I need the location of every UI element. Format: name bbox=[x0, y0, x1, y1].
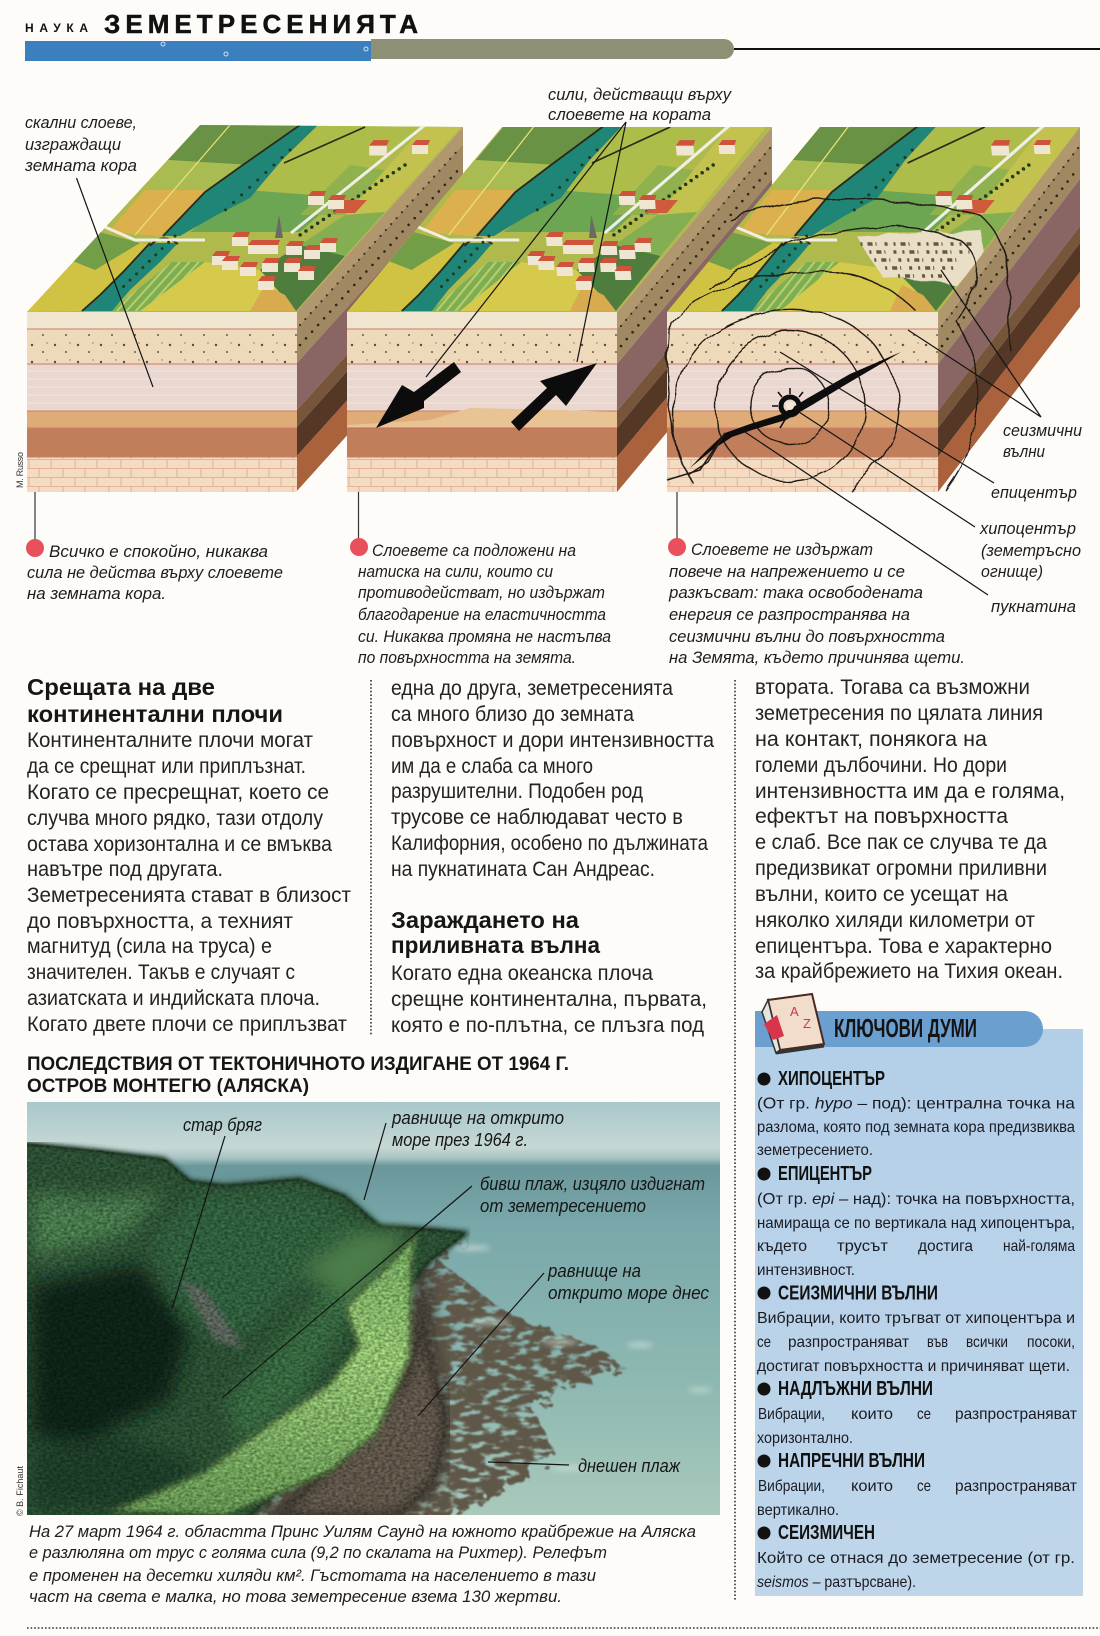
term: seismic bbox=[757, 1522, 1075, 1591]
caption 3: повече на напрежението и се bbox=[669, 562, 905, 581]
body text column 3: втората. Тогава са възможни bbox=[755, 676, 1030, 699]
body text column 3: е слаб. Все пак се случва те да bbox=[755, 831, 1047, 854]
caption 3: Слоевете не издържат bbox=[691, 540, 873, 559]
term: epicentre: интензивност. bbox=[757, 1262, 855, 1279]
heading: meeting of two plates: континентални плочи bbox=[27, 701, 283, 727]
term: seismic waves: разпространяват bbox=[788, 1334, 910, 1351]
caption 1: сила не действа върху слоевете bbox=[27, 563, 283, 582]
photo caption: На 27 март 1964 г. областта Принс Уилям Саунд на южното крайбрежие на Аляска bbox=[29, 1522, 696, 1541]
label: epicentre: епицентър bbox=[991, 483, 1077, 502]
term: epicentre: намираща се по вертикала над хипоцентъра, bbox=[757, 1215, 1075, 1232]
label: fracture: пукнатина bbox=[991, 597, 1076, 616]
photo heading: ОСТРОВ МОНТЕГЮ (АЛЯСКА) bbox=[27, 1076, 309, 1097]
diagram: block 3, rupture and seismic waves bbox=[664, 127, 1080, 493]
term: epicentre bbox=[757, 1163, 1075, 1279]
body text column 2: една до друга, земетресенията bbox=[391, 677, 673, 700]
forest and hillside bbox=[20, 1142, 470, 1525]
heading: meeting of two plates bbox=[27, 674, 283, 727]
photo caption bbox=[29, 1522, 696, 1606]
label: forces bbox=[548, 85, 732, 124]
seismic wave fronts bbox=[667, 199, 1010, 490]
body text column 3: епицентъра. Това е характерно bbox=[755, 935, 1052, 958]
caption 2 bbox=[350, 492, 611, 667]
body text column 1: значителен. Такъв е случаят с bbox=[27, 961, 295, 984]
body text column 1: Когато двете плочи се приплъзват bbox=[27, 1013, 347, 1036]
caption 1: Всичко е спокойно, никаква bbox=[49, 542, 268, 561]
photo label: former beach: от земетресението bbox=[480, 1196, 646, 1216]
photo label: sea level in 1964: равнище на открито bbox=[391, 1108, 564, 1128]
body text column 1: остава хоризонтална и се вмъква bbox=[27, 833, 332, 856]
body text column 1: Земетресенията стават в близост bbox=[27, 884, 351, 907]
body text after heading: която е по-плътна, се плъзга под bbox=[391, 1014, 704, 1037]
term: transverse waves: които bbox=[851, 1478, 893, 1495]
photo caption: е разлюляна от трус с голяма сила (9,2 по скалата на Рихтер). Релефът bbox=[29, 1543, 607, 1562]
header title: ЗЕМЕТРЕСЕНИЯТА bbox=[104, 9, 418, 39]
photo label: former beach: бивш плаж, изцяло издигнат bbox=[480, 1174, 705, 1194]
photo label: former beach bbox=[480, 1174, 705, 1216]
label: hypocentre bbox=[979, 519, 1081, 581]
icon: A-Z book: A bbox=[790, 1004, 799, 1019]
term: seismic: seismos – разтърсване). bbox=[757, 1574, 916, 1591]
label: seismic waves: сеизмични bbox=[1003, 421, 1083, 440]
term: seismic waves: СЕИЗМИЧНИ ВЪЛНИ bbox=[778, 1282, 938, 1304]
term: longitudinal waves: НАДЛЪЖНИ ВЪЛНИ bbox=[778, 1378, 933, 1400]
label: rock layers bbox=[24, 113, 137, 175]
term: longitudinal waves: хоризонтално. bbox=[757, 1430, 853, 1447]
caption 3: разкъсват: така освободената bbox=[668, 583, 923, 602]
force arrow left bbox=[376, 362, 461, 428]
term: hypocentre: земетресението. bbox=[757, 1142, 873, 1159]
header bar bbox=[25, 39, 1100, 61]
label: seismic waves: вълни bbox=[1003, 442, 1045, 461]
fault crack bbox=[667, 352, 901, 480]
body text column 2: на пукнатината Сан Андреас. bbox=[391, 858, 655, 881]
label: hypocentre: хипоцентър bbox=[979, 519, 1076, 538]
body text column 2 bbox=[391, 677, 714, 881]
term: transverse waves: НАПРЕЧНИ ВЪЛНИ bbox=[778, 1450, 925, 1472]
photo caption: е променен на десетки хиляди км². Гъстотата на населението в тази bbox=[29, 1566, 597, 1585]
label: rock layers: скални слоеве, bbox=[25, 113, 137, 132]
caption 2: натиска на сили, които си bbox=[358, 562, 553, 581]
photo heading: ПОСЛЕДСТВИЯ ОТ ТЕКТОНИЧНОТО ИЗДИГАНЕ ОТ 1964 Г. bbox=[27, 1054, 569, 1075]
term: hypocentre: разлома, която под земната кора предизвиква bbox=[757, 1119, 1075, 1136]
photo label: old shore: стар бряг bbox=[183, 1115, 262, 1135]
label: rock layers: изграждащи bbox=[25, 135, 122, 154]
body text column 1: навътре под другата. bbox=[27, 858, 223, 881]
heading: meeting of two plates: Срещата на две bbox=[27, 674, 215, 700]
body text column 1: да се срещнат или приплъзнат. bbox=[27, 755, 306, 778]
body text column 2: им да е слаба са много bbox=[391, 755, 593, 778]
term: seismic waves bbox=[757, 1282, 1075, 1375]
body text column 3: на контакт, понякога на bbox=[755, 728, 987, 751]
force arrow right bbox=[511, 363, 597, 431]
heading: birth of the tidal wave: Зараждането на bbox=[391, 907, 579, 933]
photo label: sea level in 1964: море през 1964 г. bbox=[392, 1130, 528, 1150]
caption 3: на Земята, където причинява щети. bbox=[669, 648, 965, 667]
body text column 1: до повърхността, а техният bbox=[27, 910, 293, 933]
caption 3: сеизмични вълни до повърхността bbox=[669, 627, 945, 646]
term: longitudinal waves: Вибрации, bbox=[758, 1406, 825, 1423]
caption 3 bbox=[668, 492, 965, 667]
term: transverse waves: вертикално. bbox=[757, 1502, 839, 1519]
photo label: sea level today: открито море днес bbox=[548, 1283, 709, 1303]
term: epicentre: където bbox=[757, 1238, 807, 1255]
body text column 3 bbox=[755, 676, 1065, 983]
body text after heading: срещне континентална, първата, bbox=[391, 988, 707, 1011]
body text column 3: вълни, които се усещат на bbox=[755, 883, 1008, 906]
term: seismic waves: във bbox=[927, 1334, 948, 1351]
body text column 3: ефектът на повърхността bbox=[755, 805, 1008, 828]
term: seismic waves: всички bbox=[966, 1334, 1008, 1351]
body text column 1: магнитуд (сила на труса) е bbox=[27, 935, 272, 958]
caption 2: Слоевете са подложени на bbox=[372, 541, 576, 560]
rocky tidal platform, solid inner part bbox=[256, 1260, 450, 1515]
body text column 2: разрушителни. Подобен род bbox=[391, 780, 643, 803]
diagram: block 2, forces acting on layers bbox=[347, 127, 772, 492]
column 2: article section bbox=[391, 677, 714, 1037]
hypocentre marker bbox=[772, 388, 803, 428]
body text column 3: няколко хиляди километри от bbox=[755, 909, 1035, 932]
label: rock layers: земната кора bbox=[24, 156, 137, 175]
caption 2: по повърхността на земята. bbox=[358, 648, 576, 667]
label: hypocentre: огнище) bbox=[981, 562, 1043, 581]
photo label: sea level today: равнище на bbox=[547, 1261, 641, 1281]
caption 1: на земната кора. bbox=[27, 584, 166, 603]
term: transverse waves: Вибрации, bbox=[758, 1478, 825, 1495]
heading: birth of the tidal wave bbox=[391, 907, 600, 958]
green uplifted beach bbox=[108, 1232, 418, 1516]
body text column 2: трусове се наблюдават често в bbox=[391, 806, 683, 829]
term: longitudinal waves: разпространяват bbox=[955, 1406, 1078, 1423]
photo label: present beach: днешен плаж bbox=[578, 1456, 681, 1476]
illustration credit: M. Russo bbox=[15, 452, 25, 488]
term: seismic waves: посоки, bbox=[1027, 1334, 1075, 1351]
caption 2: благодарение на еластичността bbox=[358, 605, 606, 624]
term: transverse waves: разпространяват bbox=[955, 1478, 1078, 1495]
body text after heading: Когато една океанска плоча bbox=[391, 962, 653, 985]
rocky tidal platform, broken outer edge bbox=[230, 1232, 625, 1522]
photo label: sea level in 1964 bbox=[391, 1108, 564, 1150]
term: transverse waves bbox=[757, 1450, 1078, 1519]
term: seismic waves: Вибрации, които тръгват от хипоцентъра и bbox=[757, 1310, 1075, 1327]
term: epicentre: (От гр. epi – над): точка на повърхността, bbox=[757, 1191, 1075, 1208]
term: hypocentre: ХИПОЦЕНТЪР bbox=[778, 1068, 885, 1090]
body text column 2: повърхност и дори интензивността bbox=[391, 729, 714, 752]
body text column 1 bbox=[27, 729, 351, 1036]
body text column 1: случва много рядко, тази отдолу bbox=[27, 807, 323, 830]
term: epicentre: достига bbox=[918, 1238, 973, 1255]
icon: A-Z book: Z bbox=[803, 1016, 811, 1031]
caption 2: противодействат, но издържат bbox=[358, 583, 605, 602]
label: forces: слоевете на кората bbox=[548, 105, 711, 124]
term: longitudinal waves: се bbox=[917, 1406, 931, 1423]
photo credit: © B. Fichaut bbox=[15, 1466, 25, 1516]
term: epicentre: ЕПИЦЕНТЪР bbox=[778, 1163, 872, 1185]
body text column 3: земетресения по цялата линия bbox=[755, 702, 1043, 725]
term: epicentre: най-голяма bbox=[1003, 1238, 1075, 1255]
surf bbox=[454, 1246, 712, 1470]
photo leader lines bbox=[172, 1123, 569, 1465]
body text column 2: Калифорния, особено по дължината bbox=[391, 832, 708, 855]
body text column 3: интензивността им да е голяма, bbox=[755, 780, 1065, 803]
panel: key words bbox=[755, 994, 1083, 1596]
term: longitudinal waves bbox=[757, 1378, 1078, 1447]
term: seismic: Който се отнася до земетресение (от гр. bbox=[757, 1550, 1075, 1567]
term: epicentre: трусът bbox=[837, 1238, 889, 1255]
photo caption: част на света е малка, но това земетресение взема 130 жертви. bbox=[29, 1587, 562, 1606]
caption 1 bbox=[26, 492, 283, 603]
term: hypocentre: (От гр. hypo – под): централна точка на bbox=[757, 1096, 1075, 1112]
body text column 1: Континенталните плочи могат bbox=[27, 729, 313, 752]
term: longitudinal waves: които bbox=[851, 1406, 893, 1423]
heading: birth of the tidal wave: приливната вълна bbox=[391, 932, 600, 958]
photo: Montague Island coast bbox=[20, 1102, 720, 1525]
body text column 2: са много близо до земната bbox=[391, 703, 634, 726]
term: seismic waves: се bbox=[757, 1334, 771, 1351]
mid-green slope above beach bbox=[300, 1232, 410, 1300]
term: seismic waves: достигат повърхността и причиняват щети. bbox=[757, 1358, 1070, 1375]
photo label: sea level today bbox=[547, 1261, 709, 1303]
term: hypocentre bbox=[757, 1068, 1075, 1159]
term: seismic: СЕИЗМИЧЕН bbox=[778, 1522, 875, 1544]
caption 3: енергия се разпространява на bbox=[669, 605, 910, 624]
photo heading bbox=[27, 1054, 569, 1097]
label: seismic waves bbox=[1003, 421, 1083, 461]
header title: НАУКА bbox=[25, 21, 88, 35]
body text column 3: предизвикат огромни приливни bbox=[755, 857, 1047, 880]
panel heading: КЛЮЧОВИ ДУМИ bbox=[834, 1013, 977, 1043]
icon: A-Z book bbox=[762, 994, 824, 1053]
term: transverse waves: се bbox=[917, 1478, 931, 1495]
label: hypocentre: (земетръсно bbox=[981, 541, 1081, 560]
body text column 1: азиатската и индийската плоча. bbox=[27, 987, 320, 1010]
column 1: article section bbox=[27, 674, 351, 1036]
body text column 1: Когато се пресрещнат, което се bbox=[27, 781, 329, 804]
body text column 3: за крайбрежието на Тихия океан. bbox=[755, 960, 1063, 983]
caption 2: си. Никаква промяна не настъпва bbox=[358, 627, 611, 646]
leader lines for diagram labels bbox=[76, 122, 1041, 595]
body text after heading bbox=[391, 962, 707, 1037]
body text column 3: големи дълбочини. Но дори bbox=[755, 754, 1007, 777]
label: forces: сили, действащи върху bbox=[548, 85, 732, 104]
diagram: block 1, undisturbed rock layers bbox=[27, 125, 463, 492]
